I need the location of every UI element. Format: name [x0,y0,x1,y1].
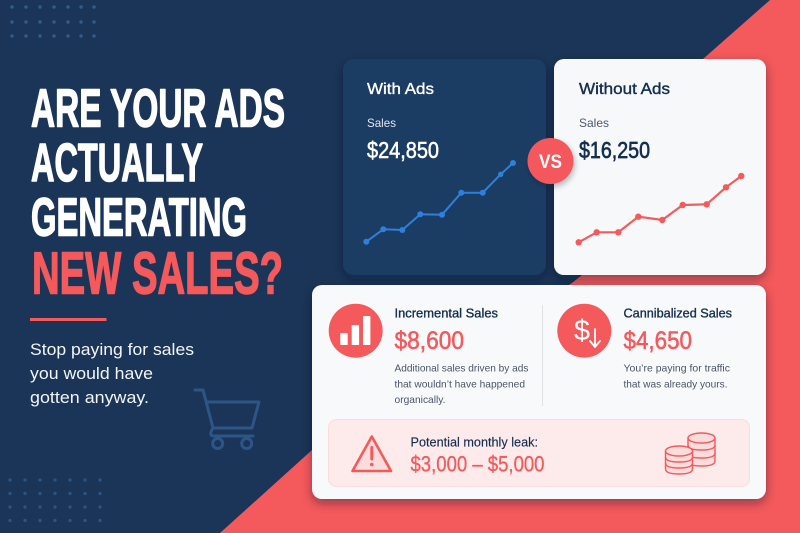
line chart: without ads [576,173,744,246]
icon: shopping cart [195,390,259,448]
panel: results [312,285,766,499]
label: sales: Sales [367,116,396,130]
block: cannibalized sales: You’re paying for traffic [624,363,730,375]
heading: with ads: With Ads [367,81,434,98]
callout: potential monthly leak [328,420,750,486]
block: cannibalized sales [624,306,732,390]
icon: bar chart [329,304,383,358]
subtitle: Stop paying for sales [30,341,194,359]
title: ACTUALLY [31,133,203,193]
title: NEW SALES? [32,240,283,306]
block: incremental sales: $8,600 [394,327,464,355]
text: leak label: Potential monthly leak: [410,435,538,450]
icon: dollar with down arrow: $ [574,315,590,347]
icon: coin stacks [666,433,715,474]
accent rule [30,318,106,321]
text: leak amount: $3,000 – $5,000 [410,452,544,477]
panel: without ads [554,59,766,275]
vs badge [528,138,574,184]
block: cannibalized sales: $4,650 [624,327,692,355]
label: sales: Sales [579,116,609,130]
line chart: with ads [363,160,516,245]
block: incremental sales: Additional sales driven by ads [394,363,528,375]
value: with ads sales: $24,850 [367,137,439,163]
dot pattern: bottom left [8,478,102,522]
panel: with ads [343,59,546,275]
vs badge: VS [539,152,562,173]
block: incremental sales: Incremental Sales [394,306,498,320]
block: cannibalized sales: Cannibalized Sales [624,306,732,320]
subtitle: you would have [30,365,153,383]
subtitle [30,341,194,407]
dot pattern: top left [10,5,96,38]
block: cannibalized sales: that was already yours. [624,378,728,390]
icon: dollar with down arrow [557,304,611,358]
block: incremental sales: that wouldn’t have happened [394,378,525,390]
title: GENERATING [31,188,247,248]
block: incremental sales: organically. [394,394,446,406]
subtitle: gotten anyway. [30,389,149,407]
heading: without ads: Without Ads [579,81,670,98]
block: incremental sales [394,306,528,406]
title [31,78,285,306]
icon: warning triangle [352,436,391,471]
title: ARE YOUR ADS [31,78,285,138]
value: without ads sales: $16,250 [579,137,650,163]
